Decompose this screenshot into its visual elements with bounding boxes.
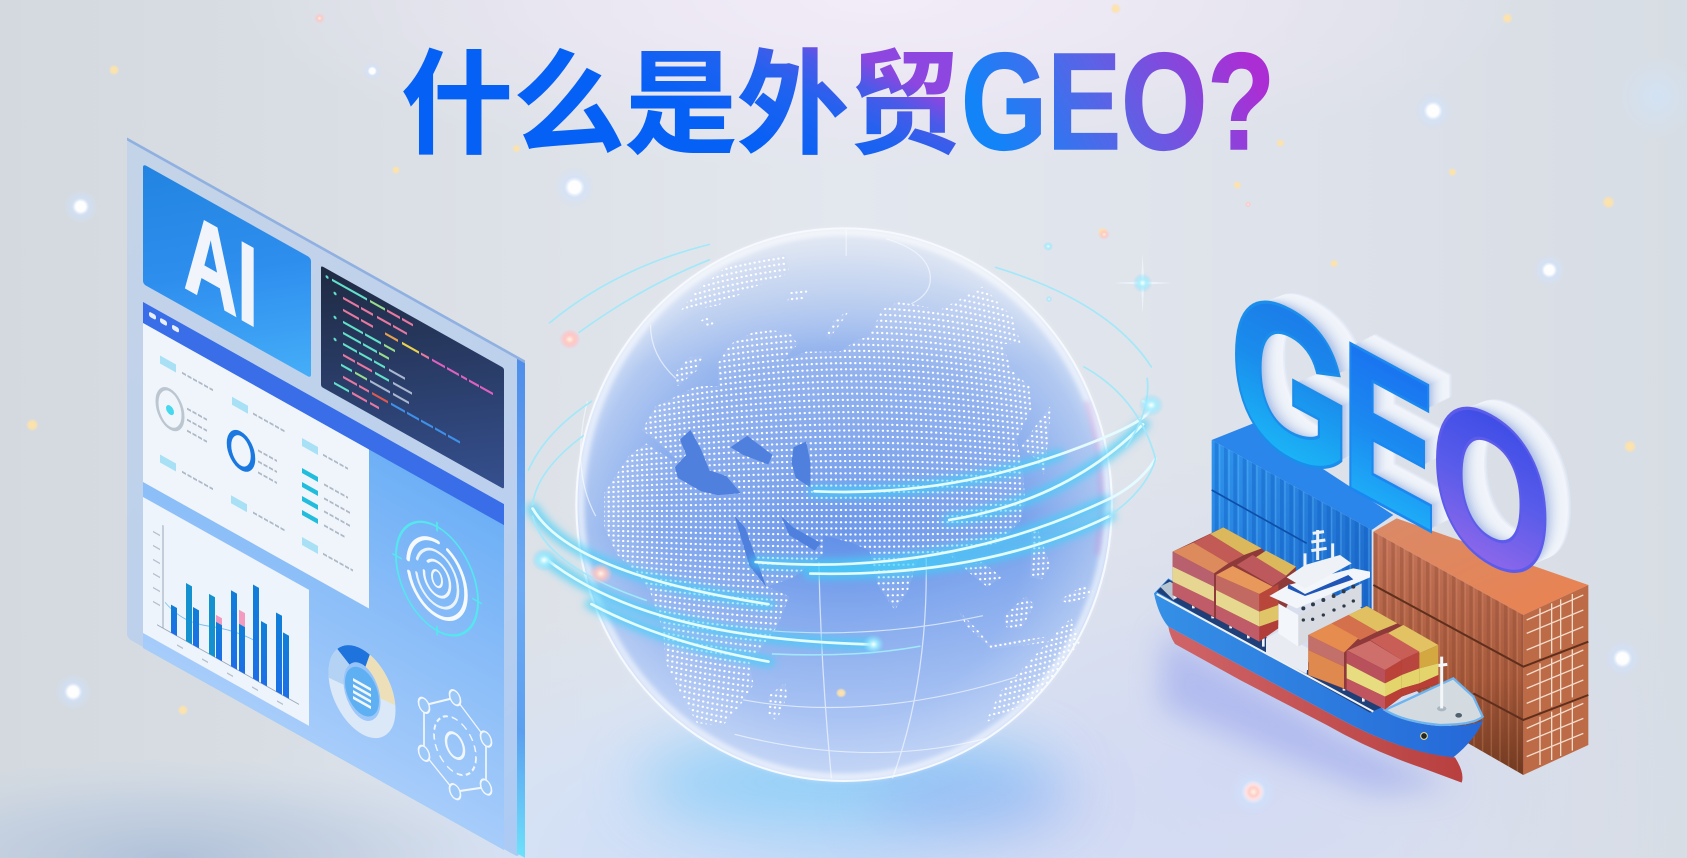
- graticule lines: [581, 229, 1017, 778]
- globe: [528, 228, 1164, 781]
- title: 什么是外贸: [401, 13, 961, 177]
- railing: [1157, 590, 1373, 712]
- title: GEO?: [961, 25, 1275, 179]
- blue lower background: [143, 302, 504, 850]
- aft cargo stacks: [1173, 527, 1296, 642]
- bow details: [1421, 657, 1462, 739]
- container doors: [1527, 594, 1583, 765]
- glass body: [127, 139, 519, 858]
- hull bottom band: [1168, 627, 1462, 783]
- inland seas: [675, 430, 821, 587]
- dotted continents: [604, 256, 1094, 726]
- containers: [1212, 423, 1588, 775]
- donut chart icon: [336, 642, 388, 741]
- panel: AI dashboard glass card: [127, 139, 525, 858]
- bow deck: [1385, 678, 1483, 725]
- AI tile: AI: [184, 187, 258, 353]
- blue containers: [1212, 423, 1393, 613]
- glass sphere: [576, 228, 1112, 781]
- 3D GEO lettering: [1231, 237, 1570, 637]
- bridge superstructure: [1266, 530, 1370, 674]
- fingerprint icon: [393, 498, 481, 659]
- gauge: [157, 383, 183, 435]
- orbit sparkle nodes: [531, 229, 1164, 698]
- deck well: [1157, 579, 1383, 713]
- forward cargo stacks: [1308, 606, 1438, 709]
- orange containers: [1373, 518, 1588, 775]
- AI tile: [143, 164, 311, 383]
- 3D GEO lettering: O: [1432, 343, 1551, 637]
- ring: [229, 427, 253, 475]
- continents tint: [637, 382, 1039, 620]
- orbit rings: [528, 244, 1156, 662]
- title: [401, 13, 1275, 179]
- 3D GEO lettering: E: [1342, 296, 1435, 576]
- network hexagon icon: [418, 670, 492, 819]
- white data card: [143, 323, 369, 609]
- hull: [1154, 578, 1483, 757]
- globe glow on floor: [638, 736, 1085, 830]
- bar chart: [143, 497, 309, 726]
- 3D GEO lettering: G: [1231, 237, 1350, 531]
- container ship: [1154, 527, 1483, 793]
- browser bar: [143, 302, 504, 525]
- right edge: [517, 357, 525, 858]
- panel top edge highlight: [127, 139, 525, 362]
- sphere rim: [576, 228, 1112, 781]
- orbit rings glow: [533, 424, 1143, 662]
- ship shadow: [1160, 630, 1457, 793]
- code window: [321, 266, 504, 489]
